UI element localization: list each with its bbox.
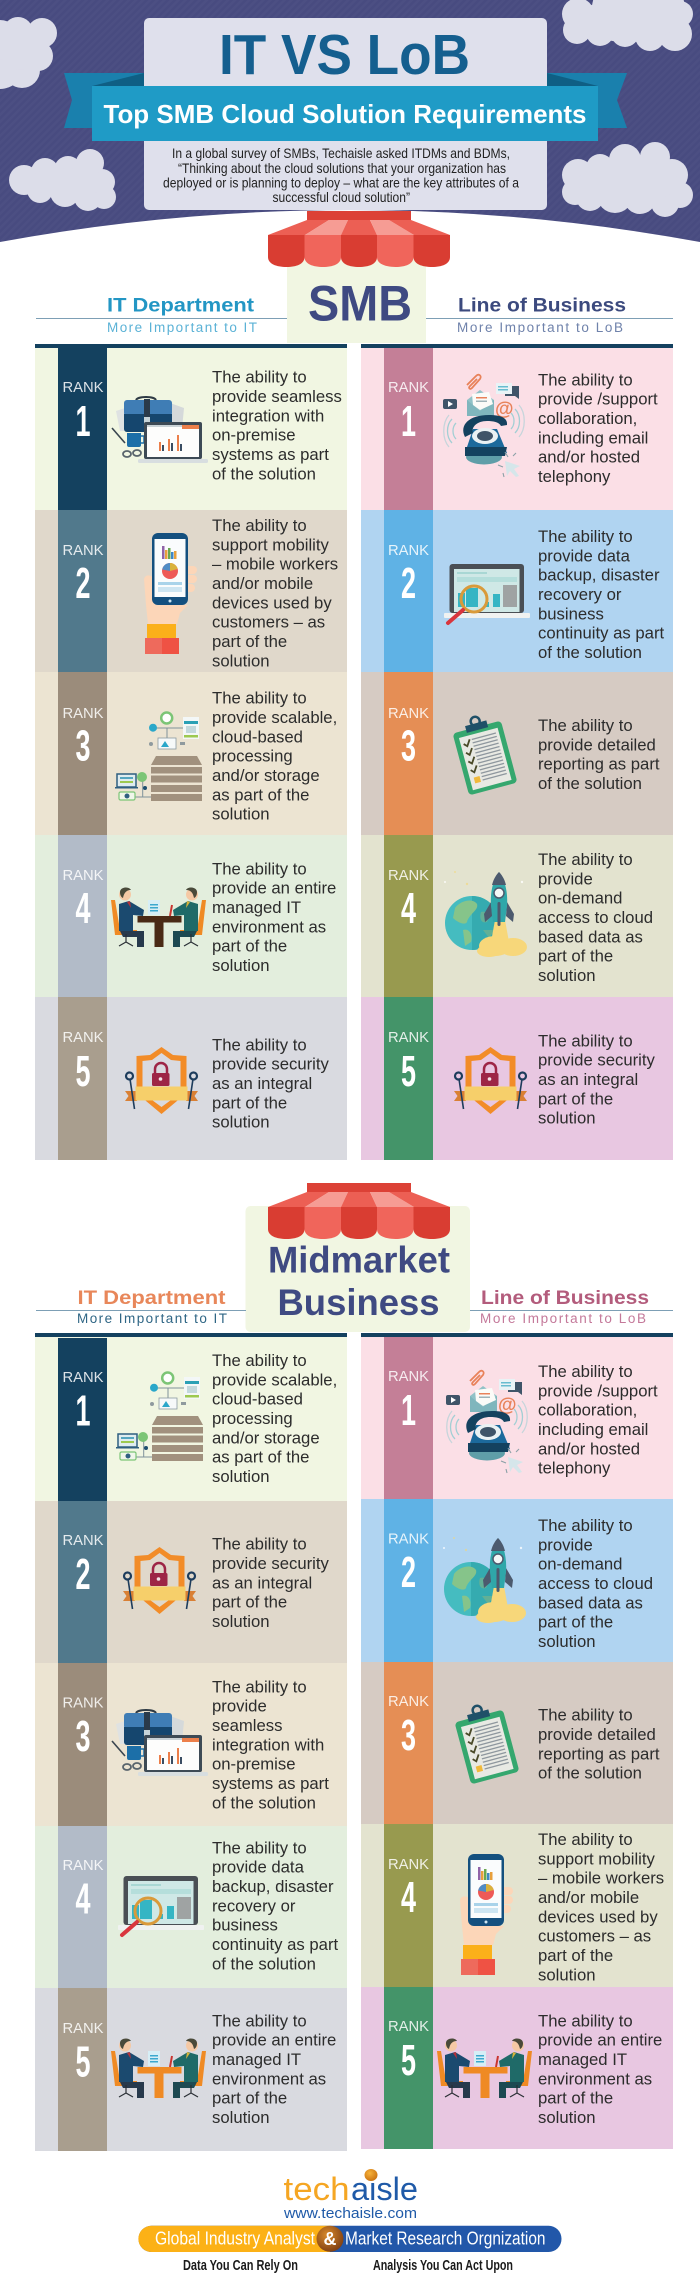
ribbon: subtitle <box>64 73 627 141</box>
requirement text: part of the <box>212 1593 287 1612</box>
panel: SMB LoB rank 1: 1 <box>401 397 416 446</box>
panel: Midmarket IT rank 4: 4 <box>76 1874 91 1923</box>
panel: SMB LoB rank 3: 3 <box>401 722 416 770</box>
requirement text: managed IT <box>212 898 301 917</box>
footer logo: techaisle: aisle <box>351 2171 418 2207</box>
requirement text: solution <box>212 651 270 670</box>
requirement text: part of the <box>538 1089 613 1108</box>
column header: IT Department: IT Department <box>107 294 255 316</box>
icon: business meeting <box>111 888 206 947</box>
panel: SMB LoB rank 4 <box>361 835 673 997</box>
panel: Midmarket IT rank 3: 3 <box>76 1712 90 1761</box>
footer tagline left: Data You Can Rely On <box>183 2258 298 2274</box>
requirement text: as an integral <box>538 1070 638 1089</box>
panel: SMB LoB rank 1 <box>361 348 673 510</box>
column header: Line of Business: Line of Business <box>481 1287 649 1309</box>
requirement text: solution <box>538 2108 596 2127</box>
requirement text: solution <box>212 956 270 975</box>
footer banner: Global Industry Analyst <box>155 2228 315 2248</box>
panel: SMB LoB rank 5: RANK <box>388 1030 429 1046</box>
panel: SMB IT rank 1: 1 <box>76 397 90 446</box>
requirement text: The ability to <box>538 716 633 735</box>
icon: clipboard checklist <box>450 710 517 795</box>
panel: SMB IT rank 4: 4 <box>76 884 91 933</box>
requirement text: The ability to <box>538 1830 633 1849</box>
panel: SMB LoB rank 4: RANK <box>388 868 429 884</box>
requirement text: integration with <box>212 406 324 425</box>
requirement text: The ability to <box>538 2011 633 2030</box>
panel: Midmarket IT rank 2 <box>35 1501 347 1663</box>
requirement text: of the solution <box>538 643 642 662</box>
requirement text: seamless <box>212 1716 282 1735</box>
requirement text: The ability to <box>212 1677 307 1696</box>
footer logo: techaisle <box>284 2169 418 2207</box>
panel: SMB IT rank 4: RANK <box>62 868 104 884</box>
requirement text: part of the <box>538 1946 613 1965</box>
requirement text: on-demand <box>538 889 622 908</box>
panel: Midmarket LoB rank 1: RANK <box>388 1369 429 1385</box>
requirement text: systems as part <box>212 1774 329 1793</box>
requirement text: on-premise <box>212 1755 295 1774</box>
intro text: deployed or is planning to deploy – what are the key attributes of a <box>163 176 519 190</box>
column header: IT Department <box>36 1287 246 1326</box>
requirement text: provide /support <box>538 1381 658 1400</box>
header background <box>0 0 700 242</box>
requirement text: provide <box>212 1697 267 1716</box>
requirement text: recovery or <box>212 1896 296 1915</box>
panel: Midmarket IT rank 1: RANK <box>62 1370 104 1386</box>
subtitle: Top SMB Cloud Solution Requirements <box>104 101 586 129</box>
intro text: successful cloud solution” <box>272 190 410 205</box>
requirement text: provide an entire <box>538 2031 662 2050</box>
panel: Midmarket LoB rank 3 <box>361 1662 673 1824</box>
requirement text: and/or mobile <box>212 574 313 593</box>
requirement text: including email <box>538 1420 648 1439</box>
requirement text: provide <box>538 1535 593 1554</box>
requirement text: on-premise <box>212 426 295 445</box>
requirement text: backup, disaster <box>538 566 660 585</box>
requirement text: The ability to <box>538 850 633 869</box>
panel: Midmarket IT rank 5 <box>35 1988 347 2151</box>
panel: Midmarket IT rank 2: 2 <box>76 1550 90 1599</box>
requirement text: solution <box>212 1467 270 1486</box>
requirement text: solution <box>212 1113 270 1132</box>
requirement text: and/or storage <box>212 766 320 785</box>
requirement text: telephony <box>538 1459 611 1478</box>
column header: IT Department: IT Department <box>78 1287 226 1309</box>
requirement text: provide /support <box>538 390 658 409</box>
panel: SMB LoB rank 5 <box>361 997 673 1160</box>
requirement text: recovery or <box>538 585 622 604</box>
panel: Midmarket LoB rank 1 <box>361 1337 673 1499</box>
requirement text: The ability to <box>212 1535 307 1554</box>
panel: Midmarket LoB rank 3: 3 <box>401 1711 416 1760</box>
icon: cloud top right <box>562 0 693 51</box>
footer tagline right: Analysis You Can Act Upon <box>373 2258 513 2274</box>
requirement text: continuity as part <box>538 624 665 643</box>
column header: IT Department <box>36 294 287 335</box>
column header: IT Department: More Important to IT <box>77 1311 227 1326</box>
icon: business meeting <box>437 2039 532 2098</box>
requirement text: provide security <box>212 1055 330 1074</box>
panel: SMB LoB rank 3: RANK <box>388 706 429 722</box>
panel: SMB LoB rank 2 <box>361 510 673 672</box>
requirement text: provide an entire <box>212 2031 336 2050</box>
requirement text: managed IT <box>212 2050 301 2069</box>
panel: SMB IT rank 5 <box>35 997 347 1160</box>
requirement text: as part of the <box>212 1448 309 1467</box>
requirement text: provide detailed <box>538 1725 656 1744</box>
requirement text: and/or mobile <box>538 1888 639 1907</box>
requirement text: customers – as <box>538 1927 651 1946</box>
icon: rocket and globe <box>443 1537 526 1623</box>
panel: Midmarket IT rank 4 <box>35 1826 347 1988</box>
icon: laptop with magnifier <box>444 564 530 623</box>
column header: IT Department: More Important to IT <box>107 320 257 335</box>
requirement text: The ability to <box>538 1706 633 1725</box>
footer banner: & <box>324 2229 336 2249</box>
requirement text: collaboration, <box>538 1401 637 1420</box>
requirement text: devices used by <box>212 593 332 612</box>
panel: Midmarket IT rank 1: 1 <box>76 1386 90 1436</box>
requirement text: solution <box>538 1109 596 1128</box>
column header: Line of Business <box>426 294 673 335</box>
requirement text: provide an entire <box>212 879 336 898</box>
footer website: www.techaisle.com <box>283 2205 417 2222</box>
requirement text: of the solution <box>538 1764 642 1783</box>
requirement text: customers – as <box>212 613 325 632</box>
column header: Line of Business: More Important to LoB <box>480 1311 646 1326</box>
requirement text: and/or storage <box>212 1428 320 1447</box>
requirement text: as an integral <box>212 1074 312 1093</box>
requirement text: part of the <box>538 947 613 966</box>
requirement text: business <box>538 604 604 623</box>
requirement text: provide scalable, <box>212 1370 337 1389</box>
requirement text: based data as <box>538 927 643 946</box>
heading: SMB: SMB <box>308 276 412 332</box>
footer logo: techaisle: tech <box>284 2171 350 2207</box>
heading: Midmarket Business <box>268 1240 450 1323</box>
requirement text: reporting as part <box>538 755 660 774</box>
panel: SMB IT rank 5: 5 <box>76 1047 90 1096</box>
requirement text: reporting as part <box>538 1744 660 1763</box>
panel: SMB LoB rank 3 <box>361 672 673 835</box>
footer banner <box>138 2226 562 2252</box>
icon: briefcase and laptop <box>112 1710 208 1776</box>
panel: Midmarket IT rank 5: 5 <box>76 2038 90 2086</box>
requirement text: solution <box>538 1632 596 1651</box>
requirement text: The ability to <box>212 859 307 878</box>
panel: Midmarket IT rank 4: RANK <box>62 1858 104 1874</box>
icon: clipboard checklist <box>452 1699 519 1784</box>
requirement text: based data as <box>538 1593 643 1612</box>
requirement text: of the solution <box>538 774 642 793</box>
panel: SMB IT rank 2: RANK <box>62 543 104 559</box>
icon: security shield <box>125 1047 198 1114</box>
icon: cloud server stack <box>116 1372 203 1461</box>
requirement text: managed IT <box>538 2050 627 2069</box>
requirement text: The ability to <box>212 516 307 535</box>
column header: Line of Business: More Important to LoB <box>457 320 623 335</box>
requirement text: on-demand <box>538 1555 622 1574</box>
requirement text: The ability to <box>212 1838 307 1857</box>
requirement text: provide scalable, <box>212 708 337 727</box>
requirement text: integration with <box>212 1735 324 1754</box>
panel: Midmarket LoB rank 4: 4 <box>401 1873 416 1922</box>
icon: laptop with magnifier <box>118 1876 204 1935</box>
icon: cloud lower right <box>562 142 693 217</box>
requirement text: provide security <box>538 1051 656 1070</box>
requirement text: provide seamless <box>212 387 342 406</box>
panel: SMB IT rank 3: 3 <box>76 722 90 770</box>
requirement text: as an integral <box>212 1573 312 1592</box>
requirement text: The ability to <box>212 2011 307 2030</box>
panel: Midmarket IT rank 2: RANK <box>62 1533 104 1549</box>
icon: telephone collaboration <box>446 1371 527 1473</box>
requirement text: solution <box>538 1965 596 1984</box>
requirement text: of the solution <box>212 464 316 483</box>
panel: header card <box>144 18 547 210</box>
requirement text: provide data <box>212 1858 305 1877</box>
requirement text: of the solution <box>212 1954 316 1973</box>
icon: rocket and globe <box>444 871 527 957</box>
icon: awning <box>268 1183 450 1239</box>
icon: cloud server stack <box>115 712 202 801</box>
requirement text: provide detailed <box>538 735 656 754</box>
requirement text: solution <box>212 1612 270 1631</box>
requirement text: access to cloud <box>538 908 653 927</box>
requirement text: The ability to <box>212 1035 307 1054</box>
icon: business meeting <box>111 2039 206 2098</box>
panel: Midmarket LoB rank 5: 5 <box>401 2036 416 2085</box>
panel: SMB LoB rank 1: RANK <box>388 380 429 396</box>
requirement text: – mobile workers <box>212 555 338 574</box>
panel: SMB LoB rank 2: RANK <box>388 543 429 559</box>
panel: Midmarket LoB rank 5: RANK <box>388 2019 429 2035</box>
column header: Line of Business <box>470 1287 673 1326</box>
panel: Midmarket LoB rank 2 <box>361 1499 673 1662</box>
requirement text: part of the <box>212 1093 287 1112</box>
requirement text: cloud-based <box>212 727 303 746</box>
requirement text: devices used by <box>538 1907 658 1926</box>
icon: telephone collaboration <box>443 375 524 477</box>
panel: Midmarket LoB rank 2: RANK <box>388 1532 429 1548</box>
title: IT VS LoB <box>219 23 470 87</box>
requirement text: The ability to <box>538 1031 633 1050</box>
icon: mobile phone in hand <box>460 1854 513 1975</box>
panel: SMB LoB rank 2: 2 <box>401 559 416 608</box>
requirement text: support mobility <box>538 1849 656 1868</box>
panel: SMB IT rank 4 <box>35 835 347 997</box>
requirement text: part of the <box>212 937 287 956</box>
requirement text: solution <box>212 2108 270 2127</box>
requirement text: processing <box>212 1409 293 1428</box>
requirement text: The ability to <box>212 689 307 708</box>
requirement text: cloud-based <box>212 1390 303 1409</box>
icon: cloud lower left <box>9 149 116 211</box>
panel: Midmarket LoB rank 4 <box>361 1824 673 1987</box>
panel: SMB IT rank 3 <box>35 672 347 835</box>
column header: Line of Business: Line of Business <box>458 294 626 316</box>
requirement text: as part of the <box>212 785 309 804</box>
panel: SMB IT rank 3: RANK <box>62 706 104 722</box>
icon: mobile phone in hand <box>144 533 197 654</box>
panel: SMB IT rank 5: RANK <box>62 1030 104 1046</box>
requirement text: backup, disaster <box>212 1877 334 1896</box>
requirement text: access to cloud <box>538 1574 653 1593</box>
icon: awning <box>268 211 450 267</box>
panel: Midmarket IT rank 5: RANK <box>62 2021 104 2037</box>
requirement text: business <box>212 1916 278 1935</box>
requirement text: The ability to <box>538 527 633 546</box>
panel: SMB IT rank 1 <box>35 348 347 510</box>
requirement text: The ability to <box>538 370 633 389</box>
heading: Midmarket Business: Business <box>278 1282 440 1323</box>
panel: SMB LoB rank 4: 4 <box>401 884 416 933</box>
requirement text: including email <box>538 428 648 447</box>
icon: cloud top left <box>0 17 57 89</box>
requirement text: The ability to <box>538 1516 633 1535</box>
requirement text: The ability to <box>212 368 307 387</box>
requirement text: part of the <box>538 2089 613 2108</box>
requirement text: of the solution <box>212 1793 316 1812</box>
panel: Midmarket LoB rank 5 <box>361 1987 673 2149</box>
requirement text: – mobile workers <box>538 1869 664 1888</box>
requirement text: processing <box>212 747 293 766</box>
icon: security shield <box>454 1047 527 1114</box>
requirement text: provide <box>538 869 593 888</box>
requirement text: collaboration, <box>538 409 637 428</box>
panel: Midmarket IT rank 3: RANK <box>62 1696 104 1712</box>
requirement text: provide data <box>538 546 631 565</box>
requirement text: and/or hosted <box>538 448 640 467</box>
panel: Midmarket IT rank 1 <box>35 1337 347 1501</box>
panel: SMB IT rank 2: 2 <box>76 559 90 608</box>
requirement text: environment as <box>212 917 326 936</box>
intro text: In a global survey of SMBs, Techaisle asked ITDMs and BDMs, <box>172 146 510 161</box>
heading: Midmarket Business: Midmarket <box>268 1240 450 1280</box>
panel: Midmarket IT rank 3 <box>35 1663 347 1826</box>
requirement text: environment as <box>212 2069 326 2088</box>
requirement text: continuity as part <box>212 1935 339 1954</box>
requirement text: solution <box>538 966 596 985</box>
panel: SMB IT rank 1: RANK <box>62 380 104 396</box>
intro text: “Thinking about the cloud solutions that your organization has <box>178 161 506 176</box>
panel: SMB heading <box>268 211 450 343</box>
footer banner: Market Research Orgnization <box>345 2228 546 2248</box>
panel: SMB IT rank 2 <box>35 510 347 672</box>
requirement text: support mobility <box>212 535 330 554</box>
icon: briefcase and laptop <box>112 397 208 463</box>
panel: Midmarket LoB rank 1: 1 <box>401 1386 416 1435</box>
panel: Midmarket LoB rank 3: RANK <box>388 1694 429 1710</box>
requirement text: environment as <box>538 2069 652 2088</box>
requirement text: provide security <box>212 1554 330 1573</box>
icon: security shield <box>123 1547 196 1614</box>
requirement text: telephony <box>538 467 611 486</box>
panel: Midmarket LoB rank 2: 2 <box>401 1548 416 1597</box>
panel: Midmarket Business heading <box>246 1183 470 1332</box>
requirement text: systems as part <box>212 445 329 464</box>
intro text <box>163 146 519 205</box>
requirement text: The ability to <box>538 1362 633 1381</box>
requirement text: part of the <box>212 632 287 651</box>
requirement text: part of the <box>212 2089 287 2108</box>
panel: Midmarket LoB rank 4: RANK <box>388 1857 429 1873</box>
requirement text: The ability to <box>212 1351 307 1370</box>
panel: SMB LoB rank 5: 5 <box>401 1047 416 1096</box>
requirement text: solution <box>212 805 270 824</box>
requirement text: part of the <box>538 1613 613 1632</box>
requirement text: and/or hosted <box>538 1439 640 1458</box>
